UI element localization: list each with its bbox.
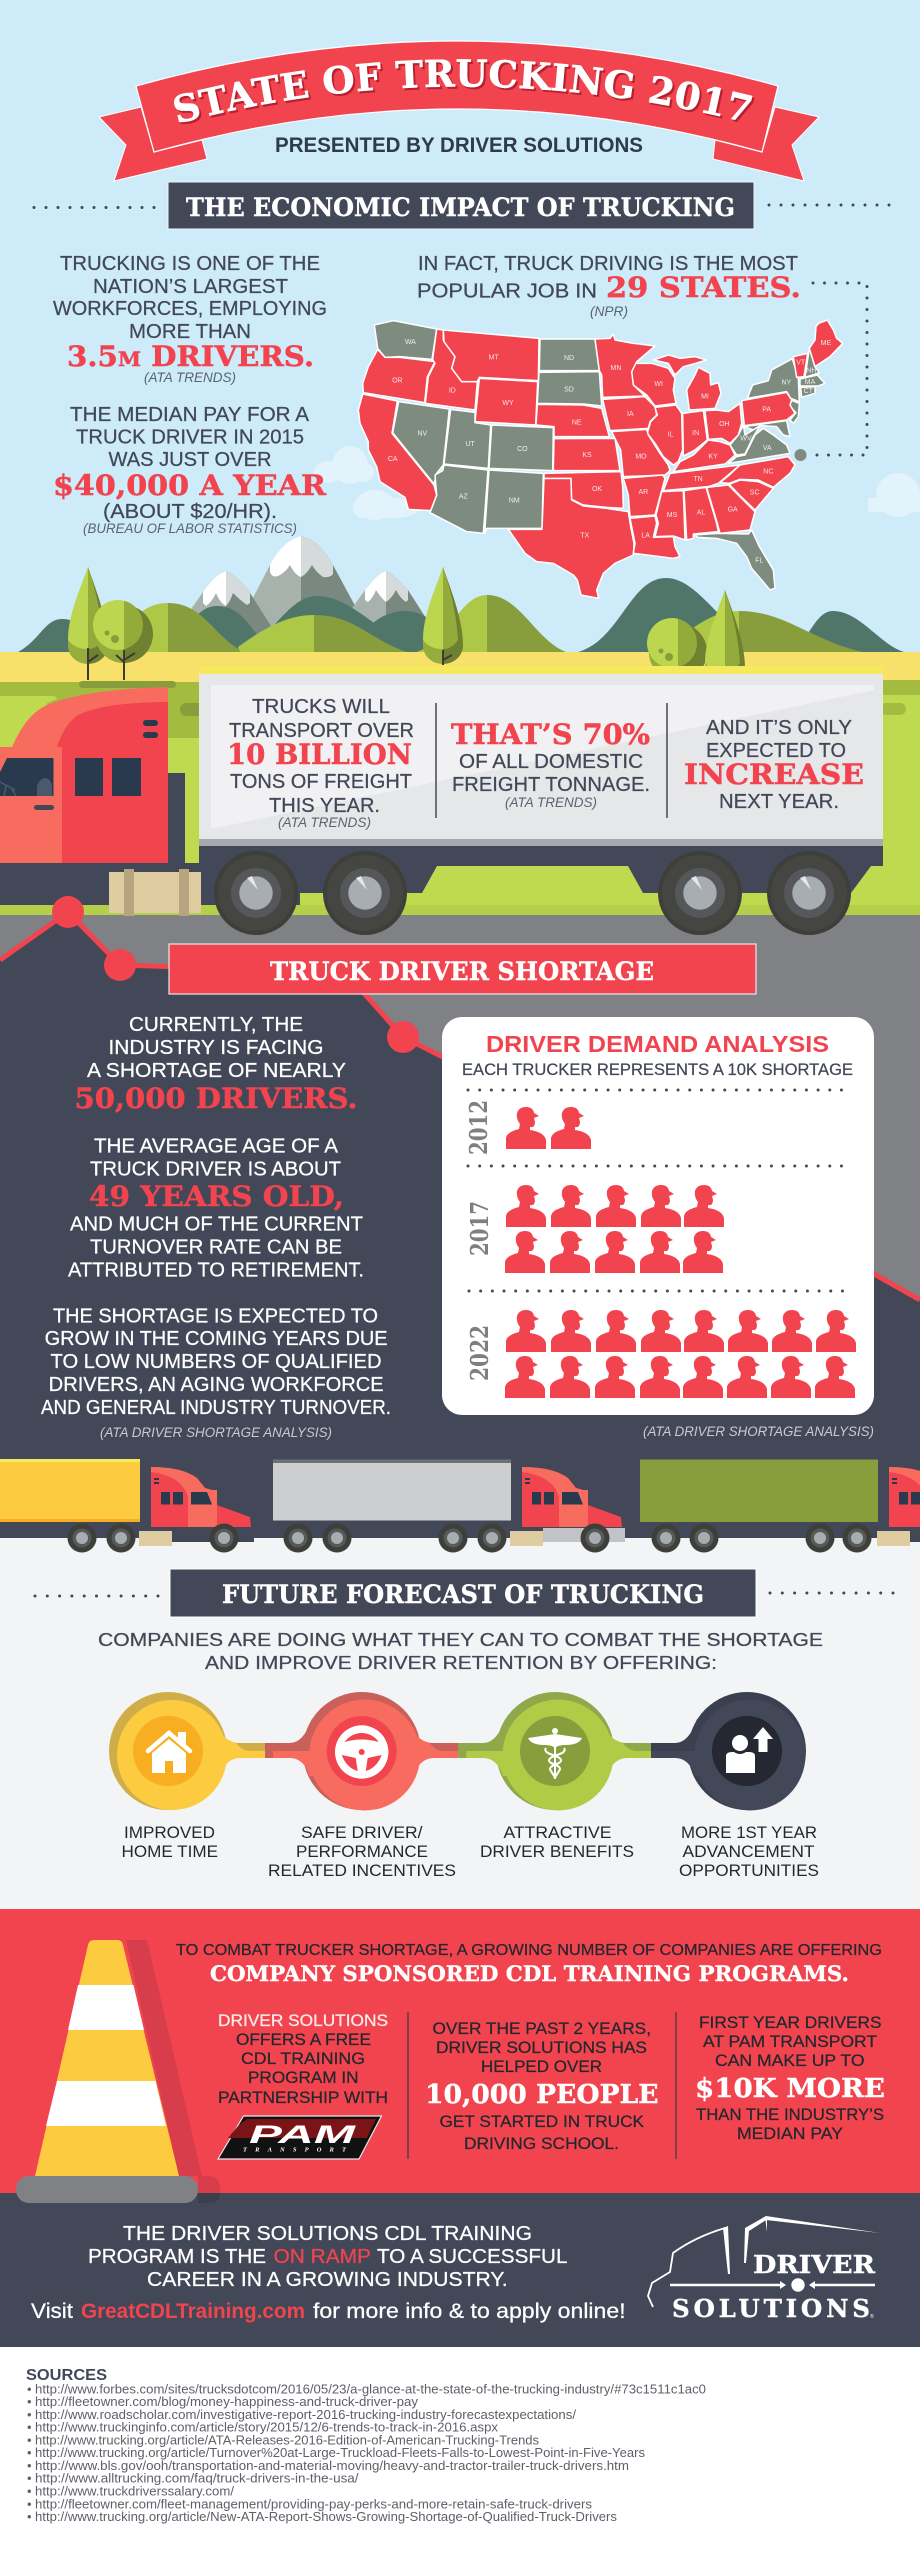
state abbreviations: NH: [806, 367, 816, 374]
light future forecast background: [0, 1538, 920, 1909]
state abbreviations: WV: [740, 435, 752, 442]
sources list: http://www.trucking.org/article/New-ATA-Report-Shows-Growing-Shortage-of-Qualified-Truck-Drivers: [35, 2509, 617, 2524]
text block: driver age: 49 YEARS OLD,: [89, 1180, 344, 1213]
trailer text: freight: TONS OF FREIGHT: [230, 771, 412, 793]
state abbreviations: WA: [405, 339, 416, 346]
text block: median pay: (BUREAU OF LABOR STATISTICS): [83, 521, 297, 536]
sources list: http://www.trucking.org/article/Turnover%20at-Large-Truckload-Fleets-Falls-to-Lowest-Point-in-Five-Years: [35, 2445, 645, 2460]
sources list: •: [27, 2432, 32, 2447]
text block: growth: [41, 1306, 391, 1440]
logo: PAM Transport: TRANSPORT: [243, 2146, 347, 2154]
column dividers: [408, 2012, 676, 2159]
grey states: [374, 321, 825, 590]
text block: driver age: TURNOVER RATE CAN BE: [90, 1236, 342, 1258]
logo: PAM Transport: PAM: [249, 2121, 357, 2149]
state abbreviations: MS: [667, 512, 678, 519]
column: 10,000 people: OVER THE PAST 2 YEARS,: [432, 2019, 651, 2038]
state abbreviations: OK: [592, 486, 602, 493]
state abbreviations: AL: [697, 510, 705, 517]
text block: popular job: 29 STATES.: [606, 271, 801, 304]
intro text: retention: COMPANIES ARE DOING WHAT THEY CAN TO COMBAT THE SHORTAGE: [98, 1630, 823, 1650]
icons: 2017 drivers: [505, 1185, 724, 1273]
subtitle: PRESENTED BY DRIVER SOLUTIONS: [275, 134, 643, 157]
icon: advancement circle: [651, 1692, 806, 1810]
sources list: •: [27, 2445, 32, 2460]
state abbreviations: GA: [728, 507, 738, 514]
call to action: Visit: [31, 2300, 73, 2323]
year label 2022: 2022: [465, 1325, 494, 1381]
state abbreviations: MN: [611, 365, 621, 372]
sources list: [27, 2381, 706, 2524]
sources list: http://fleetowner.com/blog/money-happiness-and-truck-driver-pay: [35, 2394, 419, 2409]
heading: economic impact: THE ECONOMIC IMPACT OF TRUCKING: [186, 193, 735, 222]
text block: on ramp: ON RAMP: [274, 2246, 371, 2268]
text block: shortage: A SHORTAGE OF NEARLY: [87, 1060, 346, 1082]
panel: on ramp dark: [0, 2193, 920, 2347]
column: 10,000 people: HELPED OVER: [481, 2057, 602, 2076]
text block: popular job: POPULAR JOB IN: [417, 280, 597, 302]
text block: on ramp: PROGRAM IS THE: [88, 2246, 266, 2268]
column: 10,000 people: 10,000 PEOPLE: [425, 2080, 658, 2110]
sources: [26, 2367, 706, 2524]
sources list: •: [27, 2471, 32, 2486]
text block: on ramp: TO A SUCCESSFUL: [377, 2246, 568, 2268]
tree tall left: [68, 567, 108, 680]
clouds: [314, 446, 920, 520]
text block: workforce: (ATA TRENDS): [144, 370, 236, 385]
landscape: mountains and hills: [18, 536, 904, 652]
trailer text: tonnage: THAT’S 70%: [451, 718, 650, 751]
text block: growth: AND GENERAL INDUSTRY TURNOVER.: [41, 1397, 391, 1419]
state abbreviations: NM: [509, 497, 520, 504]
text block: workforce: 3.5M DRIVERS.: [67, 340, 314, 373]
state abbreviations: AZ: [459, 494, 469, 501]
dark shortage section with trend line: [0, 896, 920, 1538]
column: free CDL training: PROGRAM IN: [248, 2068, 358, 2087]
mountain center: [225, 536, 380, 652]
text block: popular job: IN FACT, TRUCK DRIVING IS THE MOST: [418, 253, 798, 275]
state abbreviations: TN: [693, 476, 703, 483]
mountain left: [180, 571, 280, 652]
state abbreviations: WY: [502, 400, 514, 407]
panel: driver demand analysis: [442, 1017, 874, 1415]
icons: 2022 drivers: [505, 1310, 856, 1398]
sources list: •: [27, 2381, 32, 2396]
column: $10K more: FIRST YEAR DRIVERS: [699, 2013, 882, 2032]
heading: economic impact: [34, 182, 892, 229]
year label 2017: 2017: [465, 1201, 494, 1256]
sources list: •: [27, 2407, 32, 2422]
green hills: [100, 595, 863, 652]
text block: workforce: TRUCKING IS ONE OF THE: [60, 253, 320, 275]
heading: future forecast: [35, 1569, 894, 1617]
trailer text: increase: NEXT YEAR.: [719, 791, 839, 813]
state abbreviations: CO: [517, 446, 528, 453]
label: improved home time: HOME TIME: [122, 1842, 218, 1861]
state abbreviations: KY: [708, 454, 718, 461]
state abbreviations: NV: [417, 430, 428, 437]
state abbreviations: MT: [489, 355, 499, 362]
intro text: retention: AND IMPROVE DRIVER RETENTION BY OFFERING:: [205, 1653, 717, 1673]
sources list: http://www.bls.gov/ooh/transportation-and-material-moving/heavy-and-tractor-trailer-truck-drivers.htm: [35, 2458, 629, 2473]
sources list: http://fleetowner.com/fleet-management/providing-pay-perks-and-more-retain-safe-truck-drivers: [35, 2496, 593, 2511]
ground: sand, grass, road: [0, 652, 920, 1315]
wheels: [214, 851, 851, 935]
panel: driver demand analysis: EACH TRUCKER REPRESENTS A 10K SHORTAGE: [462, 1060, 853, 1079]
sources list: http://www.truckdriverssalary.com/: [35, 2484, 234, 2499]
column: 10,000 people: DRIVER SOLUTIONS HAS: [436, 2038, 647, 2057]
state abbreviations: UT: [465, 441, 475, 448]
column: free CDL training: OFFERS A FREE: [236, 2030, 371, 2049]
cab body: [0, 687, 168, 863]
sources heading: SOURCES: [26, 2367, 107, 2384]
sources list: •: [27, 2420, 32, 2435]
state abbreviations: KS: [582, 452, 592, 459]
sources list: http://www.alltrucking.com/faq/truck-drivers-in-the-usa/: [35, 2471, 359, 2486]
tree tall centre: [423, 567, 463, 665]
cab connector: [168, 773, 185, 863]
label: improved home time: IMPROVED: [124, 1823, 215, 1842]
text block: workforce: MORE THAN: [129, 321, 251, 343]
truck row: [0, 1459, 920, 1552]
state abbreviations: CT: [804, 388, 814, 395]
trailer text: freight: THIS YEAR.: [269, 795, 380, 817]
trailer text: tonnage: OF ALL DOMESTIC: [459, 751, 643, 773]
year label 2012: 2012: [464, 1100, 493, 1155]
trailer text: increase: INCREASE: [684, 758, 864, 791]
label: benefits: DRIVER BENEFITS: [480, 1842, 634, 1861]
label: advancement: [679, 1823, 819, 1880]
trailer text: tonnage: (ATA TRENDS): [505, 795, 597, 810]
column: free CDL training: CDL TRAINING: [241, 2049, 365, 2068]
icons: 2012 drivers: [506, 1107, 591, 1149]
logo: Driver Solutions: SOLUTIONS: [672, 2294, 870, 2323]
icon: traffic cone: [16, 1940, 220, 2203]
trailer text: increase: EXPECTED TO: [706, 740, 846, 762]
icon: caduceus circle: [458, 1692, 651, 1810]
label: benefits: ATTRACTIVE: [504, 1823, 612, 1842]
label: incentives: RELATED INCENTIVES: [268, 1861, 456, 1880]
source: panel: (ATA DRIVER SHORTAGE ANALYSIS): [643, 1424, 874, 1439]
state abbreviations: VT: [796, 359, 806, 366]
text block: driver age: AND MUCH OF THE CURRENT: [70, 1214, 363, 1236]
sources list: http://www.truckinginfo.com/article/story/2015/12/6-trends-to-track-in-2016.aspx: [35, 2420, 498, 2435]
mountain right: [340, 571, 440, 652]
panel: CDL training red: [0, 1909, 920, 2193]
heading: truck driver shortage: TRUCK DRIVER SHORTAGE: [270, 957, 654, 986]
teal hills: [18, 578, 904, 652]
tree tall right: [705, 590, 745, 687]
tree round left: [84, 594, 164, 680]
text block: shortage: INDUSTRY IS FACING: [108, 1037, 324, 1059]
text block: workforce: [53, 253, 327, 385]
label: incentives: SAFE DRIVER/: [301, 1823, 423, 1842]
state abbreviations: LA: [641, 532, 650, 539]
label: improved home time: [122, 1823, 218, 1861]
sources list: http://www.forbes.com/sites/trucksdotcom/2016/05/23/a-glance-at-the-state-of-the-trucking-industry/#73c1511c1ac0: [35, 2381, 706, 2396]
state abbreviations: NY: [781, 379, 792, 386]
label: advancement: MORE 1ST YEAR: [681, 1823, 817, 1842]
text block: driver age: TRUCK DRIVER IS ABOUT: [90, 1158, 341, 1180]
state abbreviations: [388, 339, 832, 564]
panel: driver demand analysis: DRIVER DEMAND ANALYSIS: [486, 1031, 829, 1057]
logo: Driver Solutions: ®: [870, 2313, 874, 2320]
US map: [358, 320, 843, 598]
text block: shortage: [74, 1014, 357, 1115]
logo: Driver Solutions: [648, 2216, 880, 2323]
trailer text: freight: (ATA TRENDS): [278, 815, 371, 830]
label: advancement: ADVANCEMENT: [682, 1842, 814, 1861]
text block: driver age: [68, 1136, 364, 1282]
sources list: •: [27, 2394, 32, 2409]
column: free CDL training: PARTNERSHIP WITH: [218, 2088, 388, 2107]
text block: popular job: (NPR): [590, 304, 628, 319]
column: 10,000 people: GET STARTED IN TRUCK: [440, 2112, 645, 2131]
text block: growth: DRIVERS, AN AGING WORKFORCE: [49, 1374, 384, 1396]
column: free CDL training: [218, 2011, 388, 2159]
trailer text: increase: [684, 717, 864, 813]
sources list: •: [27, 2496, 32, 2511]
truck: green: [640, 1460, 920, 1552]
trailer text: freight: [227, 696, 414, 830]
state abbreviations: MI: [701, 394, 709, 401]
state abbreviations: AR: [638, 489, 648, 496]
label: advancement: OPPORTUNITIES: [679, 1861, 819, 1880]
text block: growth: THE SHORTAGE IS EXPECTED TO: [53, 1306, 378, 1328]
text block: on ramp: THE DRIVER SOLUTIONS CDL TRAINING: [123, 2223, 532, 2245]
text block: median pay: THE MEDIAN PAY FOR A: [70, 404, 310, 426]
state abbreviations: SC: [750, 490, 760, 497]
tree base strip: [79, 681, 176, 688]
dotted connector to map: [794, 283, 867, 461]
trailer chassis: [0, 846, 883, 905]
heading: truck driver shortage: [169, 944, 756, 994]
call to action: [31, 2300, 626, 2323]
red states: [358, 320, 843, 598]
state abbreviations: IA: [627, 411, 634, 418]
text block: driver age: ATTRIBUTED TO RETIREMENT.: [68, 1260, 364, 1282]
column: $10K more: AT PAM TRANSPORT: [703, 2032, 877, 2051]
text block: shortage: 50,000 DRIVERS.: [74, 1082, 357, 1115]
text block: growth: TO LOW NUMBERS OF QUALIFIED: [50, 1351, 381, 1373]
text block: CDL programs intro: COMPANY SPONSORED CDL TRAINING PROGRAMS.: [210, 1961, 849, 1986]
intro text: retention: [98, 1630, 823, 1673]
trailer: [199, 666, 883, 846]
column: $10K more: [695, 2013, 885, 2143]
label: incentives: PERFORMANCE: [296, 1842, 428, 1861]
text block: median pay: (ABOUT $20/HR).: [103, 501, 277, 523]
trailer text: freight: TRUCKS WILL: [252, 696, 390, 718]
text block: median pay: TRUCK DRIVER IN 2015: [76, 426, 304, 448]
trailer text: tonnage: FREIGHT TONNAGE.: [452, 774, 650, 796]
text block: growth: (ATA DRIVER SHORTAGE ANALYSIS): [100, 1425, 332, 1440]
text block: median pay: WAS JUST OVER: [108, 449, 272, 471]
label: benefits: [480, 1823, 634, 1861]
state abbreviations: ND: [564, 355, 574, 362]
state abbreviations: MA: [805, 379, 816, 386]
state abbreviations: SD: [564, 386, 574, 393]
state abbreviations: MO: [635, 454, 647, 461]
state abbreviations: IN: [692, 430, 699, 437]
text block: CDL programs intro: [176, 1942, 882, 1986]
sources list: •: [27, 2484, 32, 2499]
label: incentives: [268, 1823, 456, 1880]
column: $10K more: THAN THE INDUSTRY’S: [696, 2105, 884, 2124]
sources list: http://www.roadscholar.com/investigative-report-2016-trucking-industry-forecastexpectations/: [35, 2407, 576, 2422]
sky background: [0, 0, 920, 660]
text block: driver age: THE AVERAGE AGE OF A: [94, 1136, 339, 1158]
logo: Driver Solutions: DRIVER: [753, 2250, 876, 2279]
title text: STATE OF TRUCKING 2017: [174, 59, 754, 124]
state abbreviations: PA: [762, 407, 771, 414]
truck: yellow: [0, 1459, 254, 1552]
state abbreviations: OR: [392, 377, 403, 384]
sources list: •: [27, 2458, 32, 2473]
sources list: •: [27, 2509, 32, 2524]
text block: on ramp: [88, 2223, 568, 2291]
state abbreviations: FL: [755, 557, 764, 564]
truck: grey: [273, 1460, 625, 1552]
text block: CDL programs intro: TO COMBAT TRUCKER SHORTAGE, A GROWING NUMBER OF COMPANIES ARE OFFERING: [176, 1942, 882, 1959]
column: $10K more: $10K MORE: [695, 2074, 885, 2104]
trees: [68, 567, 745, 692]
state abbreviations: OH: [719, 421, 730, 428]
call to action: GreatCDLTraining.com: [81, 2300, 305, 2323]
column: 10,000 people: [425, 2019, 658, 2153]
text block: growth: GROW IN THE COMING YEARS DUE: [45, 1328, 388, 1350]
state abbreviations: ID: [449, 387, 456, 394]
heading: future forecast: FUTURE FORECAST OF TRUCKING: [222, 1580, 704, 1609]
text block: popular job: [417, 253, 801, 319]
text block: workforce: NATION’S LARGEST: [93, 276, 288, 298]
state abbreviations: NE: [572, 420, 582, 427]
state abbreviations: TX: [580, 533, 589, 540]
text block: shortage: CURRENTLY, THE: [129, 1014, 303, 1036]
icon: home time circle: [109, 1692, 265, 1810]
call to action: for more info & to apply online!: [313, 2300, 626, 2323]
text block: workforce: WORKFORCES, EMPLOYING: [53, 298, 327, 320]
sources list: http://www.trucking.org/article/ATA-Releases-2016-Edition-of-American-Trucking-Trends: [35, 2432, 539, 2447]
column: $10K more: CAN MAKE UP TO: [715, 2051, 864, 2070]
ribbon main: [136, 41, 778, 152]
state abbreviations: IL: [668, 432, 674, 439]
tree round right: [638, 612, 718, 692]
ribbon tails: [99, 107, 819, 181]
text block: on ramp: CAREER IN A GROWING INDUSTRY.: [147, 2269, 508, 2291]
trailer text: freight: 10 BILLION: [227, 738, 412, 771]
text block: median pay: [53, 404, 327, 536]
trailer text: increase: AND IT’S ONLY: [706, 717, 852, 739]
state abbreviations: WI: [654, 381, 663, 388]
state abbreviations: CA: [388, 456, 398, 463]
title ribbon: [98, 40, 820, 182]
trailer text: tonnage: [451, 718, 650, 810]
text block: median pay: $40,000 A YEAR: [53, 469, 327, 502]
column: free CDL training: DRIVER SOLUTIONS: [218, 2011, 388, 2030]
big truck: [0, 666, 883, 935]
fuel tank: [109, 869, 201, 916]
state abbreviations: VA: [763, 445, 772, 452]
state abbreviations: NC: [763, 468, 773, 475]
trailer dividers: [436, 703, 667, 818]
column: 10,000 people: DRIVING SCHOOL.: [464, 2134, 619, 2153]
trailer text: freight: TRANSPORT OVER: [229, 720, 414, 742]
state abbreviations: ME: [821, 340, 832, 347]
icon: steering wheel circle: [265, 1692, 458, 1810]
logo: PAM Transport: [218, 2116, 382, 2159]
column: $10K more: MEDIAN PAY: [737, 2124, 843, 2143]
